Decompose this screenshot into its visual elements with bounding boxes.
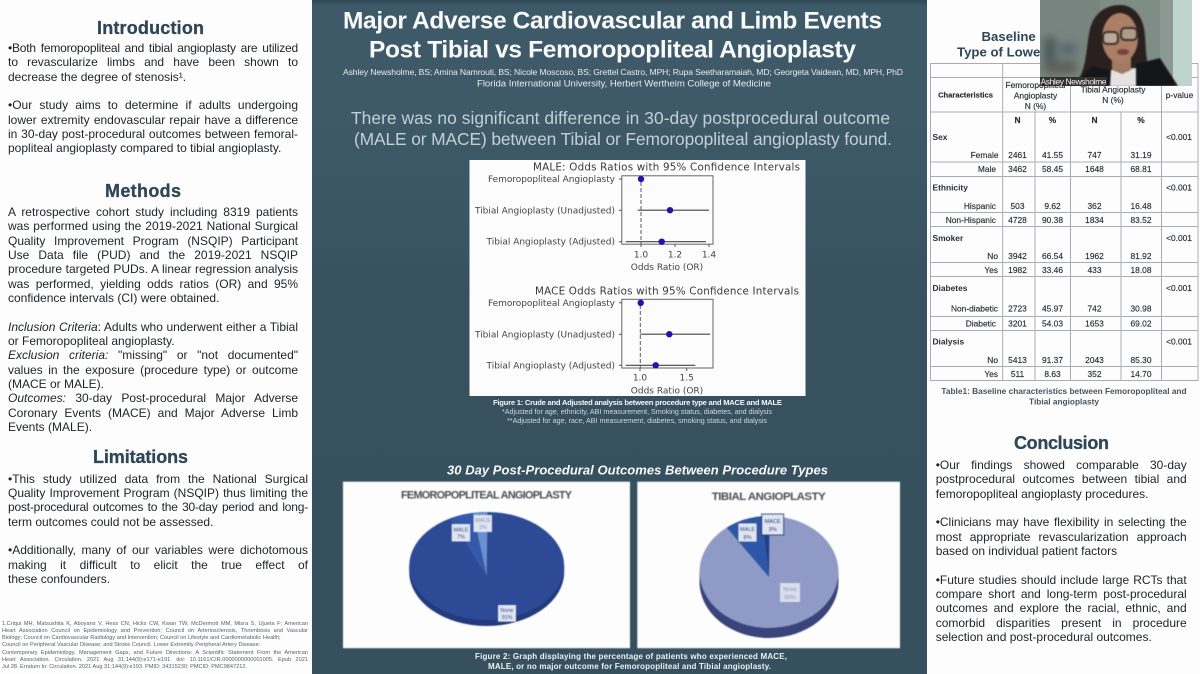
title: Major Adverse Cardiovascular and Limb Events [343, 8, 882, 34]
label: MALE 8% [738, 523, 757, 542]
chart: MALE odds ratios [474, 162, 800, 273]
table values: 433 [1088, 265, 1102, 275]
chart: forest plots figure 1 [470, 160, 806, 396]
text: reference citation: Heart Association Council on Epidemiology and Prevention; Council on Arteriosclerosis, Thrombosis and Vascular [2, 628, 308, 634]
table header text: Angioplasty [1014, 90, 1058, 100]
text: introduction body: lower extremity endovascular repair have a difference [8, 113, 298, 127]
chart: femoropopliteal pie: FEMOROPOPLITEAL ANGIOPLASTY [401, 490, 573, 502]
label: MACE 2%: MACE [475, 518, 491, 524]
table row group labels: Smoker [932, 233, 964, 243]
text: conclusion body: most appropriate revascularization approach [936, 530, 1187, 544]
text: conclusion body: based on individual patient factors [936, 544, 1117, 558]
chart: MACE odds ratios: 1.5 [680, 374, 694, 384]
text: introduction body: •Both femoropopliteal and tibial angioplasty are utilized [8, 41, 298, 55]
table values: <0.001 [1166, 132, 1192, 142]
text: methods body: confidence intervals (CI) were obtained. [8, 291, 219, 305]
table row labels [946, 150, 999, 379]
text: limitations body: Quality Improvement Program (NSQIP) thus limiting the [8, 486, 308, 500]
table values: 3201 [1008, 318, 1027, 328]
table row labels: No [987, 355, 998, 365]
table values: 83.52 [1131, 215, 1152, 225]
table values: 2723 [1008, 304, 1027, 314]
table header text: N (%) [1025, 101, 1046, 111]
table values: 1653 [1085, 318, 1104, 328]
key finding statement [351, 108, 892, 149]
heading: Conclusion: Conclusion [1014, 433, 1109, 453]
text: conclusion body: •Our findings showed comparable 30-day [936, 458, 1187, 472]
text: conclusion body: comorbid disparities present in procedure [936, 616, 1187, 630]
heading: Methods: Methods [105, 181, 181, 201]
table grid [930, 64, 1198, 380]
chart: tibial pie [637, 482, 900, 648]
chart: MACE odds ratios: MACE Odds Ratios with 95% Confidence Intervals [535, 286, 799, 298]
table values: 742 [1088, 304, 1102, 314]
chart: MACE odds ratios: Femoropopliteal Angioplasty [488, 299, 616, 309]
title: Post Tibial vs Femoropopliteal Angioplasty [369, 36, 856, 64]
table values: 503 [1011, 201, 1025, 211]
table row labels: Yes [984, 265, 998, 275]
video overlay: presenter webcam [1040, 0, 1192, 86]
table values: 91.37 [1042, 355, 1063, 365]
chart: MACE odds ratios: Tibial Angioplasty (Unadjusted) [474, 330, 615, 340]
text: methods body: Coronary Events (MACE) and Major Adverse Limb [8, 406, 298, 420]
chart: MALE odds ratios: 1.2 [668, 250, 682, 260]
table row labels: Non-Hispanic [946, 215, 996, 225]
table header text: N [1091, 115, 1098, 125]
webcam background [1040, 0, 1192, 86]
label: MALE 7%: MALE [454, 528, 469, 534]
key finding statement: (MALE or MACE) between Tibial or Femoropopliteal angioplasty found. [354, 129, 892, 149]
table row labels: Hispanic [964, 201, 996, 211]
text: methods body: was performed, yielding odds ratios (OR) and 95% [8, 277, 298, 291]
table values: 45.97 [1042, 304, 1063, 314]
key finding statement: There was no significant difference in 30-day postprocedural outcome [351, 108, 890, 128]
text: methods body: A retrospective cohort study including 8319 patients [8, 205, 298, 219]
text: methods body: Events (MALE). [8, 420, 92, 434]
text: reference citation [2, 620, 308, 670]
table: baseline characteristics [930, 29, 1198, 406]
caption: figure 1 [493, 398, 782, 425]
table header text: Tibial Angioplasty [1081, 84, 1146, 94]
table values: 1982 [1008, 265, 1027, 275]
chart: femoropopliteal pie [343, 482, 630, 648]
table values: <0.001 [1166, 336, 1192, 346]
table values: 69.02 [1131, 318, 1152, 328]
table values: 747 [1088, 150, 1102, 160]
panel: right column [930, 29, 1198, 644]
table values: 58.45 [1042, 164, 1063, 174]
table values: 30.98 [1131, 304, 1152, 314]
table values: 68.81 [1131, 164, 1152, 174]
table values: <0.001 [1166, 283, 1192, 293]
table heading [957, 29, 1135, 60]
text: methods body: (MACE or MALE). [8, 377, 104, 391]
table values: <0.001 [1166, 182, 1192, 192]
label: MACE 3% [762, 514, 784, 535]
panel: center poster background [312, 0, 927, 674]
text: limitations body: •Additionally, many of our variables were dichotomous [8, 543, 308, 557]
label: MALE 8%: 8% [743, 535, 752, 541]
text: introduction body: in 30-day post-procedural outcomes between femoral- [8, 127, 298, 141]
table row labels: Male [978, 164, 996, 174]
text: limitations body: post-procedural outcomes to the 30-day period and long- [8, 500, 308, 514]
table values: 2043 [1085, 355, 1104, 365]
text: methods body: Outcomes: 30-day Post-procedural Major Adverse [8, 391, 298, 405]
text: introduction body [8, 41, 298, 155]
table values: 90.38 [1042, 215, 1063, 225]
table values: 352 [1088, 369, 1102, 379]
caption: figure 1: **Adjusted for age, race, ABI measurement, diabetes, smoking status, and dialysis [507, 416, 767, 425]
table values: 511 [1011, 369, 1025, 379]
table header text: Femoropopliteal [1005, 80, 1066, 90]
label: None 89% [780, 583, 800, 602]
text: methods body: values in the exposure (procedure type) or outcome [8, 363, 298, 377]
table values: 85.30 [1131, 355, 1152, 365]
presenter figure [1072, 5, 1178, 86]
text: methods body: was performed using the 2019-2021 National Surgical [8, 219, 298, 233]
table row labels: Diabetic [966, 318, 996, 328]
table values: <0.001 [1166, 233, 1192, 243]
table values: 3942 [1008, 251, 1027, 261]
table values: 5413 [1008, 355, 1027, 365]
text: conclusion body: •Future studies should include large RCTs that [936, 573, 1187, 587]
chart: MALE odds ratios: 1.4 [702, 250, 716, 260]
label: None 91% [498, 605, 516, 622]
heading: 30 day outcomes: 30 Day Post-Procedural Outcomes Between Procedure Types [447, 462, 828, 478]
table values: 1962 [1085, 251, 1104, 261]
table row group labels: Diabetes [932, 283, 968, 293]
authors and affiliation [343, 67, 903, 90]
chart: MALE odds ratios: MALE: Odds Ratios with 95% Confidence Intervals [533, 162, 800, 174]
table header text: Lower Extremity [1070, 66, 1131, 76]
table row group labels: Ethnicity [932, 182, 968, 192]
text: methods body: procedure targeted PUDs. A linear regression analysis [8, 262, 298, 276]
chart: MALE odds ratios: Femoropopliteal Angioplasty [488, 175, 616, 185]
text: introduction body: to revascularize limbs and have been shown to [8, 55, 298, 69]
label: MACE 3%: 3% [769, 527, 777, 533]
text: reference citation: Jul 28. Erratum In: Circulation. 2021 Aug 31;144(9):e193. PMID: 34315230; PMCID: PMC9847212. [2, 664, 247, 670]
text: introduction body: •Our study aims to determine if adults undergoing [8, 98, 298, 112]
table header text [938, 66, 1194, 125]
text: reference citation: 1.Criqui MH, Matsushita K, Aboyans V, Hess CN, Hicks CW, Kwan TW, McDermott MM, Misra S, Ujueta F; American [2, 620, 308, 626]
text: limitations body: these confounders. [8, 572, 110, 586]
text: conclusion body: femoropopliteal angioplasty procedures. [936, 487, 1148, 501]
table header text: % [1049, 115, 1057, 125]
text: introduction body: popliteal angioplasty compared to tibial angioplasty. [8, 141, 281, 155]
text: reference citation: Council on Peripheral Vascular Disease; and Stroke Council. Lower Extremity Peripheral Artery Disease: [2, 642, 260, 648]
authors and affiliation: Florida International University, Herbert Wertheim College of Medicine [477, 78, 771, 90]
table header text: N (%) [1102, 95, 1124, 105]
text: methods body: Exclusion criteria: "missing" or "not documented" [8, 348, 298, 362]
table row labels: No [987, 251, 998, 261]
label: MALE 7%: 7% [457, 534, 465, 540]
chart: MALE odds ratios: Tibial Angioplasty (Adjusted) [486, 238, 615, 248]
table row labels: Non-diabetic [951, 304, 998, 314]
table values: 1834 [1085, 215, 1104, 225]
table header text: % [1137, 115, 1145, 125]
chart: MACE odds ratios [474, 286, 799, 396]
table heading: Baseline Characteristics [982, 29, 1135, 44]
table row labels: Female [971, 150, 999, 160]
label: None 91%: None [501, 608, 513, 614]
table values: 33.46 [1042, 265, 1063, 275]
label: None 89%: 89% [784, 595, 796, 601]
label: MACE 2%: 2% [479, 525, 487, 531]
table values: 14.70 [1131, 369, 1152, 379]
chart: MALE odds ratios: Tibial Angioplasty (Unadjusted) [474, 206, 615, 216]
text: limitations body [8, 472, 308, 586]
heading: Limitations: Limitations [93, 447, 188, 467]
table values: 3462 [1008, 164, 1027, 174]
table values: 16.48 [1131, 201, 1152, 211]
table header text: N [1014, 115, 1021, 125]
table values: 54.03 [1042, 318, 1063, 328]
chart: MACE odds ratios: Tibial Angioplasty (Adjusted) [486, 362, 615, 372]
text: methods body: Inclusion Criteria: Adults who underwent either a Tibial [8, 320, 298, 334]
text: conclusion body [936, 458, 1187, 644]
table header text: p-value [1166, 90, 1194, 100]
table values: 81.92 [1131, 251, 1152, 261]
text: limitations body: making it difficult to elicit the true effect of [8, 558, 308, 572]
text: reference citation: Contemporary Epidemiology, Management Gaps, and Future Directions: A Scientific Statement From the American [2, 650, 308, 656]
text: reference citation: Biology; Council on Cardiovascular Radiology and Intervention; Council on Lifestyle and Cardiometabolic Health; [2, 635, 281, 641]
chart: MACE odds ratios: 1.0 [633, 374, 647, 384]
label: MACE 3%: MACE [765, 519, 781, 525]
caption: table 1 [941, 386, 1187, 406]
text: conclusion body: postprocedural outcomes between tibial and [936, 472, 1187, 486]
text: methods body: Quality Improvement Program (NSQIP) Participant [8, 234, 298, 248]
table header text: Characteristics [938, 90, 993, 100]
panel: center column content [342, 8, 903, 671]
text: introduction body: decrease the degree of stenosis¹. [8, 70, 186, 84]
panel: left column [2, 18, 308, 670]
text: conclusion body: selection and post-procedural outcomes. [936, 630, 1152, 644]
label: MALE 8%: MALE [740, 527, 755, 533]
caption: figure 1: Figure 1: Crude and Adjusted analysis between procedure type and MACE and MALE [493, 398, 782, 407]
chart: MACE odds ratios: Odds Ratio (OR) [631, 386, 703, 396]
table heading: Type of Lower Extremity [957, 44, 1110, 60]
table row group labels: Dialysis [932, 336, 965, 346]
table values: 9.62 [1044, 201, 1061, 211]
label: MACE 2% [474, 515, 492, 532]
authors and affiliation: Ashley Newsholme, BS; Amina Namrouti, BS; Nicole Moscoso, BS; Grettel Castro, MPH; Rupa Seetharamaiah, MD; Georgeta Vaidean, MD, MPH, PhD [343, 67, 903, 77]
text: methods body [8, 205, 298, 434]
heading: Introduction: Introduction [97, 18, 204, 38]
table row group labels [932, 132, 968, 346]
table values: 41.55 [1042, 150, 1063, 160]
table values: 31.19 [1131, 150, 1152, 160]
table values [1008, 132, 1192, 379]
text: conclusion body: outcomes and explore the racial, ethnic, and [936, 601, 1187, 615]
caption: figure 2 [475, 652, 787, 671]
caption: figure 1: *Adjusted for age, ethnicity, ABI measurement, Smoking status, diabetes, and dialysis [502, 407, 772, 416]
text: limitations body: term outcomes could not be assessed. [8, 515, 213, 529]
text: methods body: or Femoropopliteal angioplasty. [8, 334, 175, 348]
text: methods body: Use Data file (PUD) and the 2019-2021 NSQIP [8, 248, 298, 262]
table values: 2461 [1008, 150, 1027, 160]
chart: MALE odds ratios: Odds Ratio (OR) [631, 263, 703, 273]
chart: MALE odds ratios: 1.0 [634, 250, 648, 260]
caption: figure 2: Figure 2: Graph displaying the percentage of patients who experienced MACE, [475, 652, 787, 661]
text: conclusion body: •Clinicians may have flexibility in selecting the [936, 515, 1187, 529]
table values: 18.08 [1131, 265, 1152, 275]
text: limitations body: •This study utilized data from the National Surgical [8, 472, 308, 486]
caption: table 1: Tibial angioplasty [1029, 396, 1099, 406]
caption: table 1: Table1: Baseline characteristics between Femoropopliteal and [941, 386, 1187, 396]
table values: 8.63 [1044, 369, 1061, 379]
table values: 362 [1088, 201, 1102, 211]
table values: 1648 [1085, 164, 1104, 174]
label: MALE 7% [452, 524, 470, 542]
text: reference citation: Heart Association. Circulation. 2021 Aug 31;144(9):e171-e191. doi: 10.1161/CIR.0000000000001005. Epub 2021 [2, 657, 308, 663]
caption: figure 2: MALE, or no major outcome for Femoropopliteal and Tibial angioplasty. [488, 662, 771, 671]
table values: 66.54 [1042, 251, 1063, 261]
table values: 4728 [1008, 215, 1027, 225]
text: conclusion body: compare short and long-term post-procedural [936, 587, 1187, 601]
table row labels: Yes [984, 369, 998, 379]
label: None 89%: None [783, 587, 797, 593]
label: None 91%: 91% [502, 615, 513, 621]
chart: tibial pie: TIBIAL ANGIOPLASTY [712, 491, 826, 503]
table row group labels: Sex [932, 132, 948, 142]
title [343, 8, 882, 64]
